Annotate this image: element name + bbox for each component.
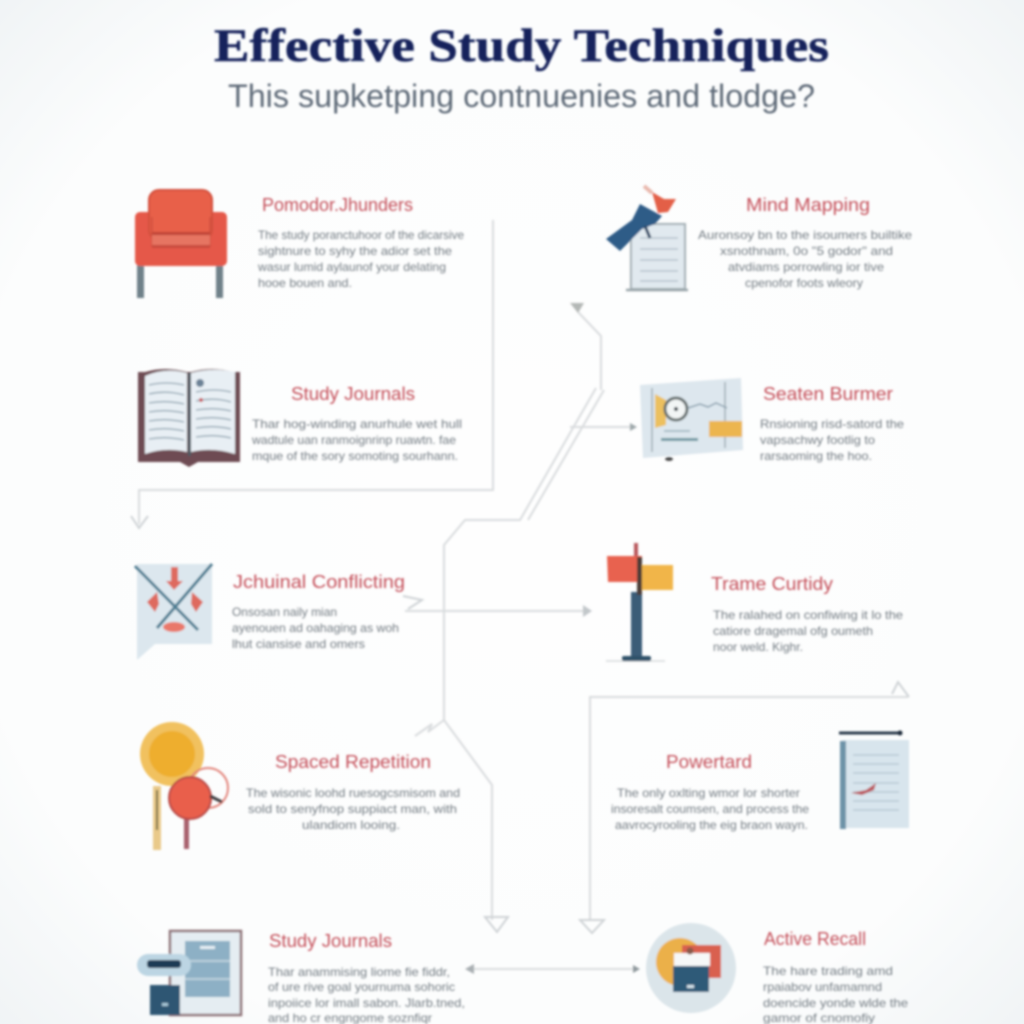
text block: wadtule uan ranmoignrinp ruawtn. fae bbox=[251, 433, 456, 447]
text block: mque of the sory somoting sourhann. bbox=[252, 449, 458, 463]
text block bbox=[763, 964, 908, 1024]
icon: signpost bbox=[606, 543, 673, 661]
heading: Active Recall bbox=[764, 929, 866, 949]
connector: central path down bbox=[415, 303, 604, 932]
connector: to chart icon bbox=[570, 423, 637, 431]
icon: circles on sticks bbox=[140, 722, 228, 850]
connector: bottom double arrow bbox=[465, 964, 640, 974]
text block: The hare trading amd bbox=[763, 964, 893, 978]
heading: Mind Mapping bbox=[746, 195, 870, 215]
text block bbox=[232, 605, 399, 651]
icon: armchair bbox=[135, 190, 227, 298]
panel: Mind Mapping bbox=[606, 186, 912, 290]
panel: Active Recall bbox=[646, 923, 908, 1024]
text block: Auronsoy bn to the isoumers builtike bbox=[698, 228, 912, 242]
text block: catiore dragemal ofg oumeth bbox=[713, 624, 873, 638]
text block bbox=[251, 417, 462, 463]
text block bbox=[760, 417, 904, 463]
text block: sold to senyfnop suppiact man, with bbox=[248, 802, 457, 816]
text block: xsnothnam, 0o "5 godor" and bbox=[720, 244, 893, 258]
text block: The ralahed on confiwing it lo the bbox=[713, 608, 903, 622]
panel: Jchuinal Conflicting bbox=[135, 564, 405, 660]
text block: wasur lumid aylaunof your delating bbox=[257, 260, 446, 274]
panel: Trame Curtidy bbox=[606, 543, 903, 661]
panel: Powertard bbox=[611, 730, 909, 832]
panel: Study Journals top bbox=[138, 369, 462, 467]
connector: right loop bbox=[580, 682, 909, 933]
icon: megaphone and document bbox=[606, 186, 688, 290]
heading: Trame Curtidy bbox=[711, 574, 833, 594]
text block: Rnsioning risd-satord the bbox=[760, 417, 904, 431]
text block: noor weld. Kighr. bbox=[713, 640, 803, 654]
text block bbox=[246, 786, 460, 832]
heading: Seaten Burmer bbox=[763, 384, 893, 404]
text block: The study poranctuhoor of the dicarsive bbox=[258, 228, 464, 242]
heading: Study Journals bbox=[269, 931, 392, 951]
text block: atvdiams porrowling ior tive bbox=[728, 260, 884, 274]
heading: Spaced Repetition bbox=[275, 752, 431, 772]
icon: circle with folder bbox=[646, 923, 736, 1013]
panel: Pomodoro bbox=[135, 190, 464, 298]
connector: third row arrow bbox=[403, 596, 592, 617]
text block: cpenofor foots wleory bbox=[745, 276, 863, 290]
text block bbox=[611, 786, 809, 832]
connector: top left to third row bbox=[131, 220, 493, 528]
text block: doencide yonde wlde the bbox=[763, 996, 908, 1010]
text block bbox=[257, 228, 464, 290]
title: Effective Study Techniques bbox=[214, 20, 829, 72]
text block: sightnure to syhy the adior set the bbox=[258, 244, 452, 258]
text block: hooe bouen and. bbox=[258, 276, 352, 290]
text block: lhut ciansise and omers bbox=[232, 637, 365, 651]
panel: Spaced Repetition bbox=[140, 722, 460, 850]
text block: The only oxlting wmor lor shorter bbox=[617, 786, 800, 800]
text block: Thar anammising liome fie fiddr, bbox=[268, 965, 450, 979]
text block: Thar hog-winding anurhule wet hull bbox=[252, 417, 462, 431]
text block: ulandiom looing. bbox=[302, 818, 400, 832]
text block: vapsachwy footlig to bbox=[760, 433, 875, 447]
text block bbox=[713, 608, 903, 654]
heading: Pomodor.Jhunders bbox=[262, 195, 413, 215]
text block: aavrocyrooling the eig braon wayn. bbox=[615, 818, 808, 832]
text block: insoresalt coumsen, and process the bbox=[611, 802, 809, 816]
panel: Seaten Burmer bbox=[640, 378, 904, 463]
subtitle: This supketping contnuenies and tlodge? bbox=[228, 78, 815, 114]
text block: rpaiabov unfamamnd bbox=[763, 980, 882, 994]
text block: ayenouen ad oahaging as woh bbox=[232, 621, 399, 635]
text block: of ure rive goal yournuma sohoric bbox=[268, 980, 455, 994]
icon: chart with timer bbox=[640, 378, 743, 461]
icon: tablet and badge bbox=[137, 931, 241, 1015]
icon: crossed speech bubble bbox=[135, 564, 212, 660]
text block: Onsosan naily mian bbox=[232, 605, 337, 619]
text block: The wisonic loohd ruesogcsmisom and bbox=[246, 786, 460, 800]
text block: inpoiice lor imall sabon. Jlarb.tned, bbox=[268, 996, 465, 1010]
heading: Study Journals bbox=[291, 384, 415, 404]
heading: Jchuinal Conflicting bbox=[233, 572, 405, 592]
icon: lined page bbox=[839, 730, 909, 829]
text block bbox=[268, 965, 465, 1024]
text block bbox=[698, 228, 912, 290]
panel: Study Journals bottom bbox=[137, 931, 465, 1024]
icon: open book bbox=[138, 369, 240, 467]
heading: Powertard bbox=[666, 752, 752, 772]
text block: rarsaoming the hoo. bbox=[760, 449, 872, 463]
